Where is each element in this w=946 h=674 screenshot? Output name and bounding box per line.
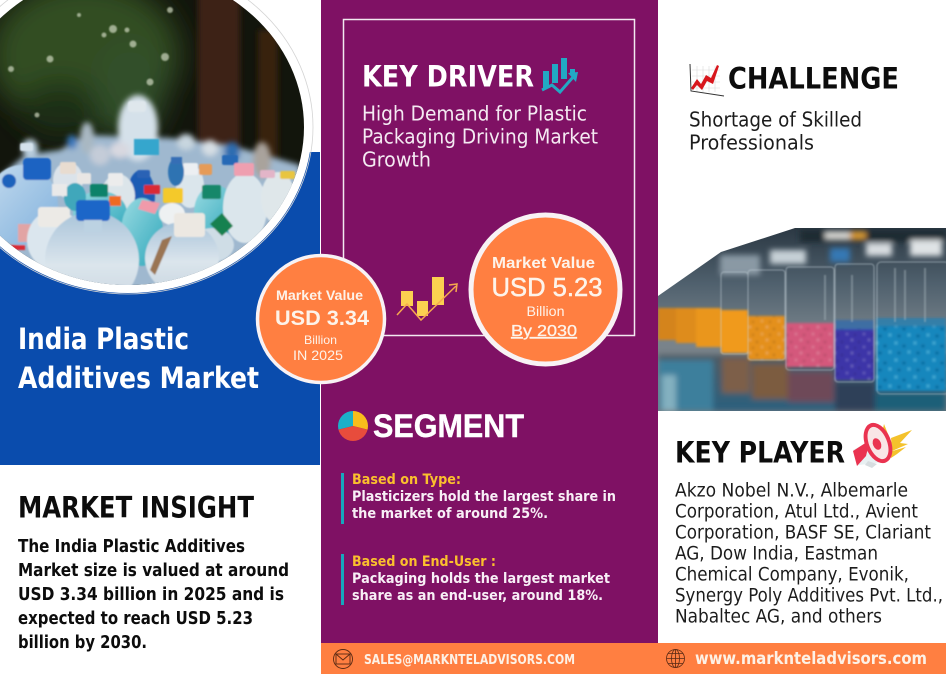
text block: key driver description: [362, 102, 598, 172]
heading: challenge: CHALLENGE: [728, 62, 899, 96]
title: Additives Market: [18, 361, 259, 395]
text block: market insight body: [18, 537, 289, 653]
text block: key player list: AG, Dow India, Eastman: [675, 544, 878, 564]
text block: challenge description: [689, 108, 862, 154]
callout: market value 2025: Market Value: [276, 288, 364, 303]
icon: rising bars and arrow: [397, 277, 457, 320]
icon: megaphone: [853, 419, 912, 468]
title: India Plastic: [18, 322, 189, 356]
text block: key player list: Akzo Nobel N.V., Albemarle: [675, 480, 908, 502]
text block: market insight body: The India Plastic Additives: [18, 537, 245, 557]
title: [18, 322, 259, 395]
panel: footer contact bar: SALES@MARKNTELADVISORS.COM: [364, 653, 575, 668]
segment: based on end-user: [341, 554, 610, 605]
panel: purple centre column: [321, 0, 658, 644]
heading: key player: KEY PLAYER: [675, 436, 845, 470]
segment: based on end-user: Based on End-User :: [352, 554, 496, 570]
text block: market insight body: USD 3.34 billion in 2025 and is: [18, 585, 284, 605]
panel: title band in blue: [0, 152, 320, 465]
callout: market value 2030: Market Value: [492, 255, 595, 272]
callout: market value 2030: USD 5.23: [492, 272, 602, 302]
image: jars of plastic pellets: [658, 228, 946, 411]
segment: based on type: the market of around 25%.: [352, 506, 548, 522]
callout: market value 2025: Billion: [304, 333, 337, 347]
icon: teal growth chart: [542, 58, 578, 92]
text block: key driver description: Growth: [362, 148, 431, 172]
text block: challenge description: Professionals: [689, 130, 814, 154]
text block: key player list: Chemical Company, Evonik,: [675, 564, 909, 586]
icon: globe: [666, 650, 684, 668]
icon: mail: [334, 650, 352, 668]
text block: key player list: [675, 480, 943, 628]
callout: market value 2030: By 2030: [511, 323, 577, 340]
segment: based on type: Based on Type:: [352, 472, 461, 488]
text block: key player list: Corporation, Atul Ltd., Avient: [675, 502, 918, 522]
text block: challenge description: Shortage of Skilled: [689, 108, 862, 132]
segment: based on end-user: share as an end-user, around 18%.: [352, 588, 603, 604]
panel: key driver outline box: [344, 20, 634, 336]
callout: market value 2025: IN 2025: [293, 348, 343, 363]
callout: market value 2030: Billion: [526, 304, 564, 319]
panel: footer contact bar: www.marknteladvisors.com: [695, 649, 927, 668]
segment: based on type: Plasticizers hold the largest share in: [352, 489, 616, 505]
segment: based on end-user: Packaging holds the largest market: [352, 571, 610, 587]
heading: market insight: MARKET INSIGHT: [18, 490, 254, 524]
segment: based on type: [341, 472, 616, 524]
text block: market insight body: Market size is valued at around: [18, 561, 289, 581]
callout: market value 2025: USD 3.34: [275, 307, 369, 330]
callout: market value 2030: [471, 215, 620, 364]
image: plastic bottles in circle: [0, 0, 320, 308]
heading: key driver: KEY DRIVER: [362, 60, 534, 94]
text block: key driver description: Packaging Driving Market: [362, 124, 598, 148]
text block: market insight body: billion by 2030.: [18, 633, 147, 653]
icon: pie chart: [338, 411, 368, 441]
panel: footer contact bar: [321, 643, 946, 674]
text block: key player list: Nabaltec AG, and others: [675, 606, 882, 628]
icon: red growth chart: [690, 64, 724, 96]
heading: segment: SEGMENT: [373, 408, 524, 444]
text block: market insight body: expected to reach USD 5.23: [18, 609, 253, 629]
text block: key driver description: High Demand for Plastic: [362, 102, 587, 126]
callout: market value 2025: [258, 256, 384, 382]
